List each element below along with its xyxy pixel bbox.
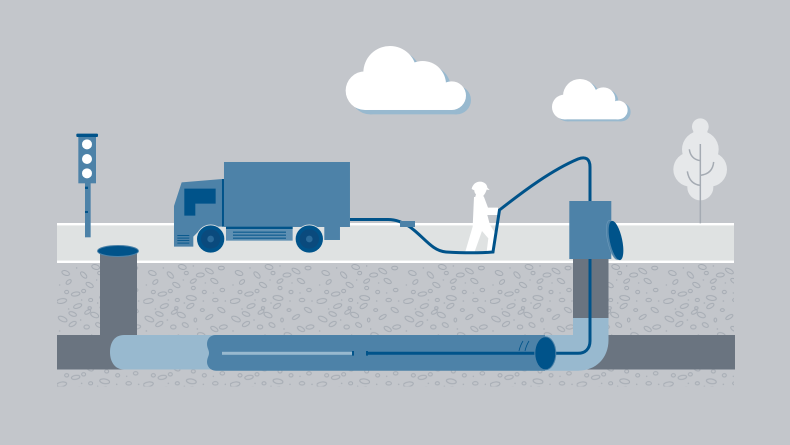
truck cab — [174, 179, 222, 247]
pipe opening — [535, 337, 556, 370]
cloud: large — [346, 46, 471, 114]
cable inside pipe — [367, 258, 590, 353]
light blue liner — [110, 335, 230, 370]
medium blue inserted pipe — [207, 335, 545, 371]
worker — [465, 182, 498, 252]
cab grille — [177, 235, 189, 244]
manhole cover — [603, 219, 626, 261]
traffic light — [76, 134, 98, 237]
tree — [673, 118, 727, 223]
gravel ground — [57, 263, 734, 386]
hose from truck to manhole — [350, 158, 590, 253]
fold marks on pipe — [519, 341, 529, 351]
hose connector — [400, 221, 415, 227]
right shaft — [573, 258, 608, 318]
cloud: small — [552, 79, 631, 121]
front wheel — [196, 224, 225, 253]
cab window — [184, 189, 216, 216]
rear skirt — [324, 227, 340, 240]
truck chassis — [226, 227, 293, 241]
light rod — [222, 352, 352, 355]
rod end marker — [352, 351, 354, 356]
cab divider — [222, 179, 224, 227]
truck cargo box — [224, 162, 350, 227]
cable end marker — [366, 351, 368, 356]
old pipe right — [585, 335, 735, 370]
old pipe left — [57, 335, 127, 370]
truck — [174, 162, 350, 253]
road surface — [57, 223, 734, 263]
right manhole box — [569, 201, 611, 259]
left manhole shaft — [98, 246, 138, 336]
rear wheel — [295, 224, 324, 253]
light blue liner elbow — [530, 318, 608, 371]
